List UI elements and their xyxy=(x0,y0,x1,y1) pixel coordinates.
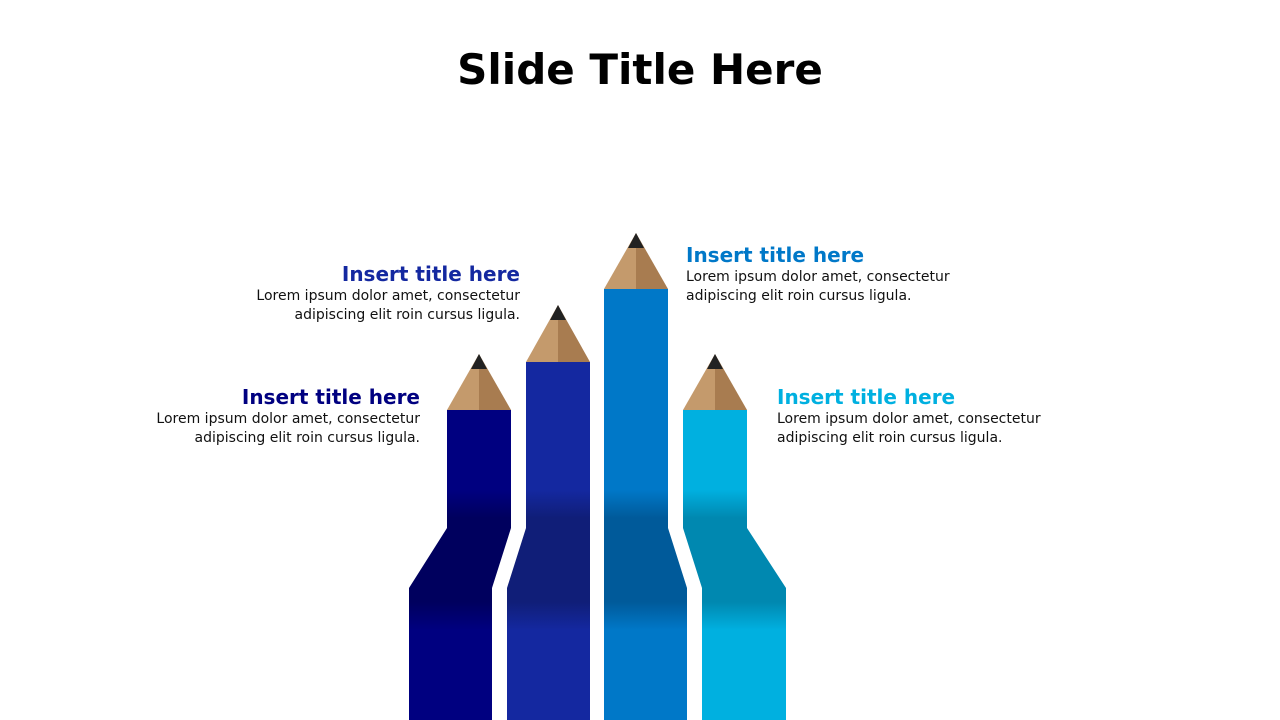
text block 4: Insert title here xyxy=(777,385,955,409)
pencil 3 xyxy=(604,233,687,720)
text block 2: adipiscing elit roin cursus ligula. xyxy=(295,307,520,323)
text block 3 xyxy=(686,243,950,304)
text block 3: Insert title here xyxy=(686,243,864,267)
text block 4: Lorem ipsum dolor amet, consectetur xyxy=(777,411,1041,427)
text block 4: adipiscing elit roin cursus ligula. xyxy=(777,430,1002,446)
text block 3: adipiscing elit roin cursus ligula. xyxy=(686,288,911,304)
text block 1: Insert title here xyxy=(242,385,420,409)
text block 2 xyxy=(256,262,520,323)
pencil 2 xyxy=(507,305,590,720)
text block 1: adipiscing elit roin cursus ligula. xyxy=(195,430,420,446)
text block 4 xyxy=(777,385,1041,446)
pencil 1 xyxy=(409,354,511,720)
text block 2: Insert title here xyxy=(342,262,520,286)
text block 1 xyxy=(156,385,420,446)
title: Slide Title Here xyxy=(457,45,823,94)
text block 1: Lorem ipsum dolor amet, consectetur xyxy=(156,411,420,427)
text block 2: Lorem ipsum dolor amet, consectetur xyxy=(256,288,520,304)
pencil 4 xyxy=(683,354,786,720)
text block 3: Lorem ipsum dolor amet, consectetur xyxy=(686,269,950,285)
